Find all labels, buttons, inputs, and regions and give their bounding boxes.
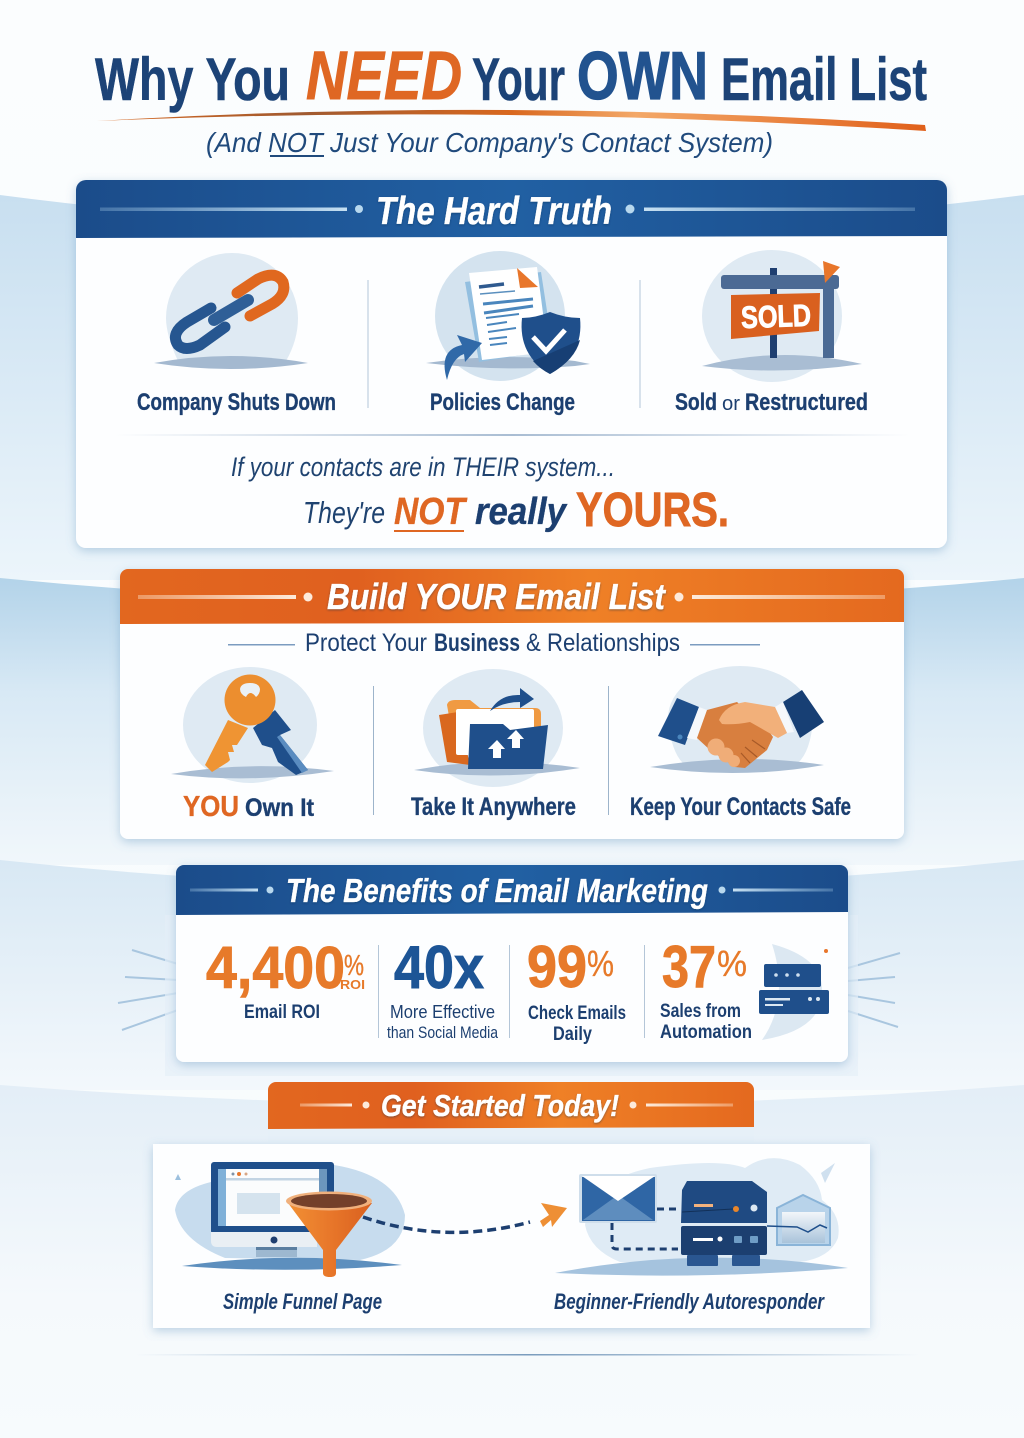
stat: 4,400% roi [206,935,365,1023]
icon: automation server [759,944,829,1040]
icon: broken chain [154,253,308,369]
title: OWN [577,38,708,114]
stat: 37% [660,934,752,1043]
label: you own it: YOU [183,791,239,823]
label: sold or restructured: or [722,393,740,415]
title underline swoosh [97,110,926,131]
subheading: protect your business: Business [434,629,520,657]
title: Why You [95,46,290,113]
header: build your email list [120,569,904,624]
stat: 40x: 40x [394,934,484,1001]
subheading: protect your business: Protect Your [305,629,427,657]
icon: sold sign: SOLD [740,298,812,335]
header: the hard truth: The Hard Truth [376,190,612,233]
stat: 37%: % [717,943,747,984]
text: they're not really yours: They're [303,495,385,530]
text: they're not really yours: NOT [394,491,467,533]
icon: policy document and shield [426,251,590,381]
stat: 4,400% roi: ROI [340,977,365,992]
icon: keys [171,667,334,783]
label: policies change: Policies Change [430,389,575,416]
stat: 40x [387,934,498,1042]
icon: folder [414,669,580,787]
panel: the hard truth [76,180,947,548]
icon: autoresponder server [555,1158,848,1276]
icon: funnel page [175,1162,405,1277]
title: Email List [721,46,927,113]
header: get started today [268,1082,754,1129]
stat: 99%: Check Emails [528,1003,626,1024]
stat: 4,400% roi: % [344,950,364,982]
title: NEED [306,37,462,114]
label: simple funnel page: Simple Funnel Page [223,1289,382,1314]
stat: 99%: % [587,943,614,984]
icon: handshake [650,666,824,773]
title: Your [472,46,565,113]
text: they're not really yours: really [475,491,568,533]
panel: get started tools [153,1144,870,1328]
subheading: protect your business: & Relationships [526,629,680,657]
stat: 4,400% roi: 4,400 [206,935,345,1001]
text: if your contacts: If your contacts are in THEIR system... [231,452,615,482]
label: sold or restructured [675,389,868,416]
label: you own it: Own It [245,794,315,822]
label: you own it [183,791,315,823]
header: get started today: Get Started Today! [381,1088,619,1123]
text: they're not really yours [303,484,729,537]
panel: build your email list [120,569,904,839]
arrow: dashed funnel to autoresponder [363,1203,567,1232]
label: beginner-friendly autoresponder: Beginner-Friendly Autoresponder [554,1289,825,1314]
icon: sold sign [702,250,862,382]
stat: 99% [527,934,626,1045]
header: build your email list: Build YOUR Email List [327,576,667,617]
subheading: protect your business [228,629,760,657]
label: take it anywhere: Take It Anywhere [411,793,576,821]
panel: get started header backing [268,1126,754,1142]
label: keep your contacts safe: Keep Your Contacts Safe [630,793,851,821]
panel: the benefits of email marketing [176,865,848,1062]
stat: 99%: 99 [527,934,587,1000]
label: company shuts down: Company Shuts Down [137,389,336,416]
decorative rays [118,950,900,1030]
title [95,37,927,114]
stat: 99%: Daily [553,1024,592,1045]
header: benefits: The Benefits of Email Marketing [286,872,708,909]
subtitle: (And NOT Just Your Company's Contact System) [206,127,773,158]
stat: 37%: Sales from [660,1001,741,1022]
label: sold or restructured: Restructured [745,389,868,416]
stat: 40x: More Effective [390,1002,495,1022]
header: benefits [176,865,848,915]
stat: 37%: 37 [662,934,716,1000]
stat: 37%: Automation [660,1022,752,1043]
backing panel: benefits [165,915,858,1076]
stat: 4,400% roi: Email ROI [244,1002,320,1023]
header: the hard truth [76,180,947,238]
text: they're not really yours: YOURS. [576,484,729,537]
stat: 40x: than Social Media [387,1023,498,1042]
label: sold or restructured: Sold [675,389,717,416]
